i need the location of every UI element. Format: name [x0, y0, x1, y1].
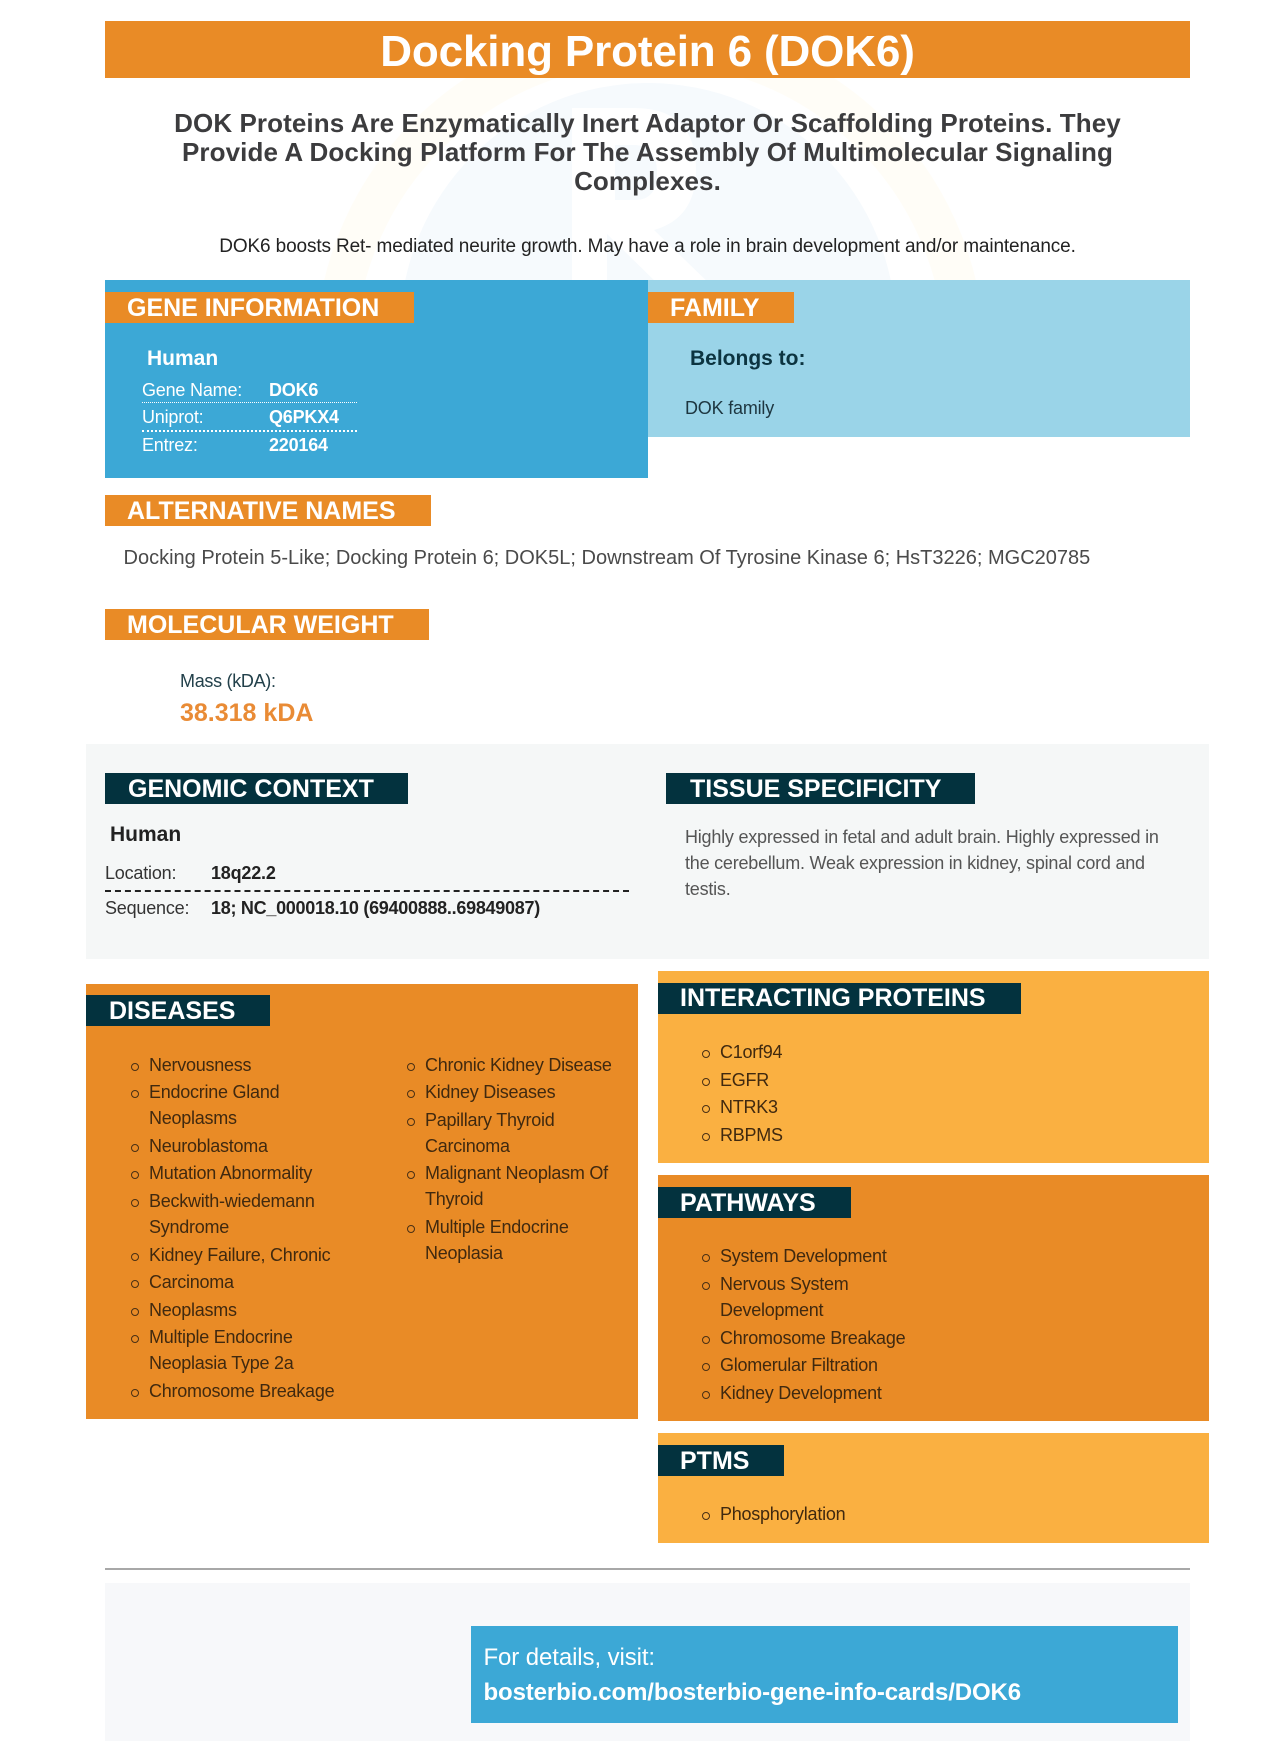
panel: gene information	[105, 280, 648, 478]
pathways list	[702, 1246, 905, 1403]
disease list column 2: Chronic Kidney Disease	[425, 1055, 612, 1075]
gene name row	[142, 377, 357, 403]
pathways list: Development	[720, 1300, 823, 1320]
heading: family	[648, 292, 794, 323]
family value: DOK family	[685, 398, 774, 418]
heading: ptms: PTMS	[680, 1447, 749, 1475]
call to action box	[471, 1626, 1178, 1723]
disease list column 2: Kidney Diseases	[425, 1082, 555, 1102]
disease list column 1: Multiple Endocrine	[149, 1327, 293, 1347]
summary text: DOK6 boosts Ret- mediated neurite growth. May have a role in brain development and/or maintenance.	[219, 236, 1076, 257]
disease list column 1: Beckwith-wiedemann	[149, 1191, 315, 1211]
disease list column 1: Neoplasms	[149, 1300, 237, 1320]
disease list column 2: Neoplasia	[425, 1243, 503, 1263]
panel: diseases	[86, 984, 638, 1419]
subtitle	[174, 108, 1121, 196]
interacting proteins list: EGFR	[720, 1070, 769, 1090]
disease list column 2: Carcinoma	[425, 1136, 510, 1156]
location row	[105, 860, 629, 892]
tissue specificity text	[685, 827, 1159, 899]
visit label: For details, visit:	[484, 1644, 655, 1671]
disease list column 1: Neoplasms	[149, 1108, 237, 1128]
watermark logo	[406, 83, 890, 280]
panel: family	[648, 280, 1190, 437]
disease list column 1: Endocrine Gland	[149, 1082, 279, 1102]
ptms list: Phosphorylation	[720, 1504, 845, 1524]
location row: Location:	[105, 863, 176, 883]
location row: 18q22.2	[211, 863, 276, 883]
entrez row: 220164	[269, 435, 328, 455]
disease list column 2: Thyroid	[425, 1189, 483, 1209]
subtitle: Complexes.	[574, 166, 721, 196]
disease list column 2: Papillary Thyroid	[425, 1110, 554, 1130]
heading: family: FAMILY	[670, 294, 759, 322]
visit url: bosterbio.com/bosterbio-gene-info-cards/DOK6	[484, 1679, 1021, 1706]
alternative names text: Docking Protein 5-Like; Docking Protein 6; DOK5L; Downstream Of Tyrosine Kinase 6; HsT3226; MGC20785	[124, 547, 1090, 569]
panel: pathways	[658, 1175, 1209, 1421]
disease list column 1: Carcinoma	[149, 1272, 234, 1292]
disease list column 1: Mutation Abnormality	[149, 1163, 312, 1183]
heading: gene information: GENE INFORMATION	[127, 294, 379, 322]
heading: tissue specificity: TISSUE SPECIFICITY	[690, 775, 941, 803]
interacting proteins list	[702, 1042, 783, 1145]
disease list column 2: Malignant Neoplasm Of	[425, 1163, 608, 1183]
uniprot row: Uniprot:	[142, 407, 203, 427]
heading: interacting proteins: INTERACTING PROTEINS	[680, 984, 986, 1012]
pathways list: Chromosome Breakage	[720, 1328, 905, 1348]
pathways list: Nervous System	[720, 1274, 849, 1294]
disease list column 1	[131, 1055, 334, 1401]
panel: genomic context and tissue specificity	[86, 744, 1209, 959]
disease list column 2: Multiple Endocrine	[425, 1217, 569, 1237]
title banner: Docking Protein 6 (DOK6)	[380, 27, 915, 76]
subtitle: DOK Proteins Are Enzymatically Inert Adaptor Or Scaffolding Proteins. They	[174, 108, 1121, 138]
gene name row: Gene Name:	[142, 380, 242, 400]
disease list column 1: Syndrome	[149, 1217, 229, 1237]
panel: ptms	[658, 1433, 1209, 1543]
gene name row: DOK6	[269, 380, 318, 400]
title banner	[105, 21, 1190, 78]
entrez row	[142, 435, 328, 455]
species label: Human	[147, 347, 218, 370]
sequence row: Sequence:	[105, 898, 189, 918]
heading: molecular weight: MOLECULAR WEIGHT	[127, 611, 394, 639]
heading: diseases: DISEASES	[109, 997, 235, 1025]
pathways list: Kidney Development	[720, 1383, 882, 1403]
heading: diseases	[86, 995, 270, 1026]
tissue specificity text: the cerebellum. Weak expression in kidney, spinal cord and	[685, 853, 1145, 873]
disease list column 1: Neoplasia Type 2a	[149, 1353, 294, 1373]
disease list column 1: Nervousness	[149, 1055, 251, 1075]
pathways list: System Development	[720, 1246, 887, 1266]
disease list column 1: Kidney Failure, Chronic	[149, 1245, 330, 1265]
entrez row: Entrez:	[142, 435, 198, 455]
uniprot row	[142, 404, 357, 432]
disease list column 1: Chromosome Breakage	[149, 1381, 334, 1401]
interacting proteins list: NTRK3	[720, 1097, 778, 1117]
heading: pathways	[658, 1187, 851, 1218]
tissue specificity text: testis.	[685, 879, 730, 899]
heading: pathways: PATHWAYS	[680, 1189, 816, 1217]
panel: interacting proteins	[658, 971, 1209, 1163]
subtitle: Provide A Docking Platform For The Assembly Of Multimolecular Signaling	[182, 137, 1113, 167]
interacting proteins list: C1orf94	[720, 1042, 782, 1062]
species label: Human	[110, 823, 181, 846]
pathways list: Glomerular Filtration	[720, 1355, 878, 1375]
uniprot row: Q6PKX4	[269, 407, 339, 427]
heading: ptms	[658, 1445, 784, 1476]
interacting proteins list: RBPMS	[720, 1125, 783, 1145]
sequence row	[105, 898, 540, 918]
belongs to label: Belongs to:	[690, 347, 806, 370]
panel: footer	[105, 1583, 1190, 1741]
disease list column 2	[407, 1055, 612, 1263]
heading: genomic context: GENOMIC CONTEXT	[128, 775, 374, 803]
tissue specificity text: Highly expressed in fetal and adult brain. Highly expressed in	[685, 827, 1159, 847]
mass value: 38.318 kDA	[180, 699, 313, 727]
mass label: Mass (kDA):	[180, 671, 276, 691]
panel: genomic context and tissue specificity: 18; NC_000018.10 (69400888..69849087)	[211, 898, 540, 918]
heading: alternative names: ALTERNATIVE NAMES	[127, 497, 396, 525]
disease list column 1: Neuroblastoma	[149, 1136, 268, 1156]
